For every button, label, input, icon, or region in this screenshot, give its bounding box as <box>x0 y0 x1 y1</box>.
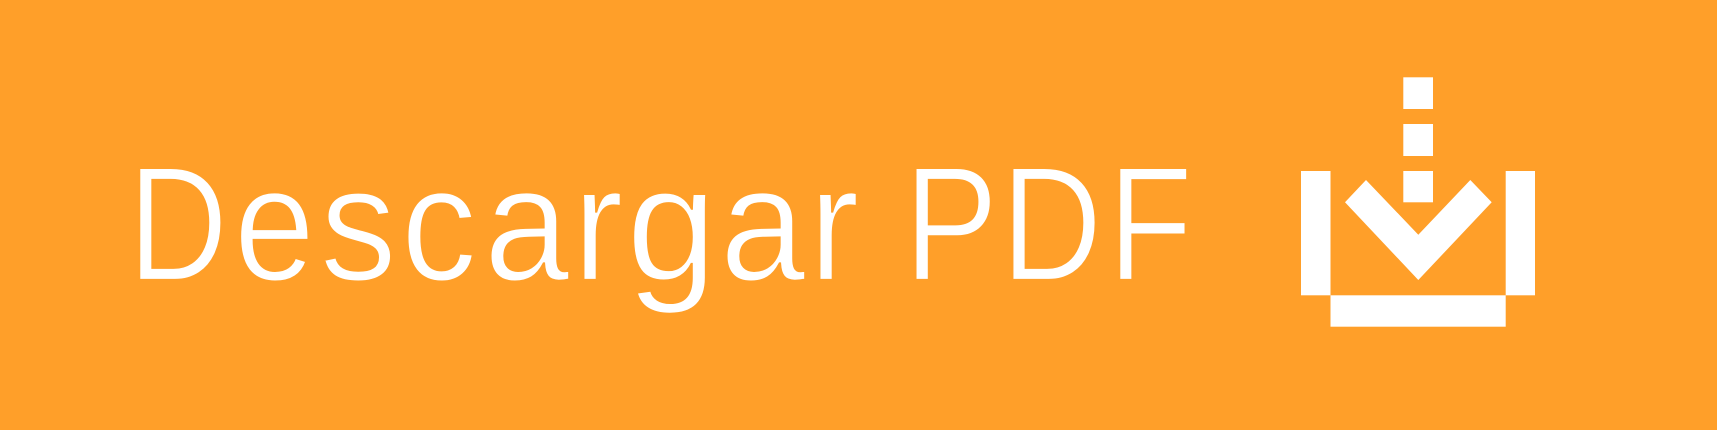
heading: Descargar PDF: g <box>626 132 717 315</box>
heading: Descargar PDF: r <box>573 132 623 315</box>
icon part: tray <box>1301 171 1535 327</box>
heading: Descargar PDF: D <box>1001 132 1102 315</box>
heading: Descargar PDF: r <box>809 132 859 315</box>
heading: Descargar PDF: F <box>1108 132 1192 315</box>
heading: Descargar PDF: P <box>904 132 998 315</box>
heading: Descargar PDF: e <box>234 132 315 315</box>
heading: Descargar PDF: a <box>720 132 805 315</box>
heading: Descargar PDF: a <box>484 132 569 315</box>
heading: Descargar PDF: c <box>401 132 477 315</box>
icon part: dashed arrow shaft <box>1403 77 1433 202</box>
heading: Descargar PDF: D <box>128 132 228 315</box>
heading: Descargar PDF: s <box>320 132 397 315</box>
heading: Descargar PDF <box>128 132 1192 315</box>
icon part: arrow head chevron <box>1345 180 1492 280</box>
